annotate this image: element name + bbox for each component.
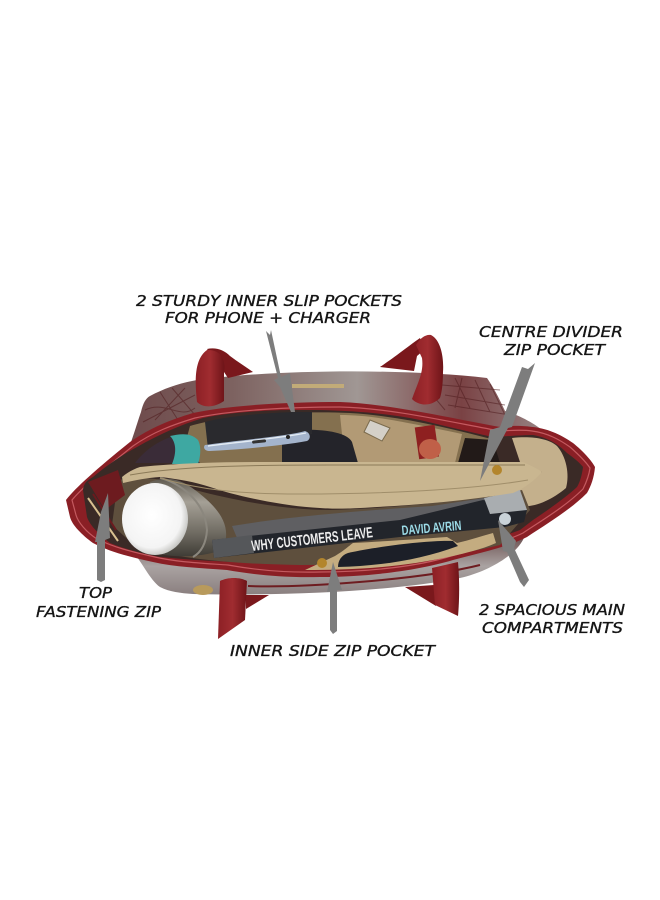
- teal water bottle: [135, 434, 200, 464]
- label: top fastening zip: FASTENING ZIP: [36, 603, 162, 621]
- rim highlight: [72, 407, 590, 572]
- book author: DAVID AVRIN: [401, 518, 462, 538]
- back panel croc leather: [128, 371, 545, 450]
- white key tag: [364, 420, 390, 441]
- interior dark: [83, 410, 583, 563]
- label: top fastening zip: [36, 584, 162, 621]
- back handle left: [196, 348, 253, 406]
- book: [212, 490, 527, 558]
- label: centre divider zip pocket: ZIP POCKET: [503, 341, 607, 359]
- label: inner slip pockets: 2 STURDY INNER SLIP POCKETS: [136, 292, 403, 310]
- lipstick: [415, 425, 441, 459]
- front handle right: [405, 562, 459, 616]
- black pouch: [282, 430, 358, 463]
- brand plate: [292, 384, 344, 388]
- front panel: [133, 538, 524, 594]
- gold zip pull: [492, 465, 502, 475]
- arrow: main compartments: [498, 520, 529, 587]
- label: spacious main compartments: COMPARTMENTS: [482, 619, 624, 637]
- label: centre divider zip pocket: CENTRE DIVIDER: [479, 323, 623, 341]
- label: centre divider zip pocket: [479, 323, 623, 359]
- steel bottle: [122, 478, 226, 557]
- arrow: phone pockets: [266, 330, 295, 412]
- label: inner slip pockets: [136, 292, 403, 327]
- bag illustration: [66, 335, 595, 639]
- inner side zip pocket: [305, 533, 496, 570]
- dark gap beside divider: [458, 438, 500, 463]
- label: inner slip pockets: FOR PHONE + CHARGER: [165, 309, 371, 327]
- main compartment: [112, 478, 530, 565]
- arrow: side zip pocket: [327, 562, 342, 634]
- label: inner side zip pocket: INNER SIDE ZIP POCKET: [230, 642, 437, 660]
- red rim: [66, 402, 595, 577]
- back handle right: [380, 335, 443, 405]
- gold side stud: [193, 585, 213, 595]
- book upper cover: [232, 498, 527, 545]
- front handle left: [218, 578, 269, 639]
- book title: WHY CUSTOMERS LEAVE: [251, 524, 374, 555]
- arrow: top fastening zip: [95, 493, 110, 582]
- arrow: centre divider: [480, 363, 535, 481]
- label: top fastening zip: TOP: [79, 584, 113, 602]
- phone: [204, 431, 310, 451]
- label: spacious main compartments: [479, 601, 625, 637]
- label: spacious main compartments: 2 SPACIOUS MAIN: [479, 601, 625, 619]
- right end lining: [512, 437, 568, 506]
- back pocket lining: [180, 412, 495, 463]
- top fastening zip: [88, 470, 125, 541]
- divider pocket: [122, 462, 542, 509]
